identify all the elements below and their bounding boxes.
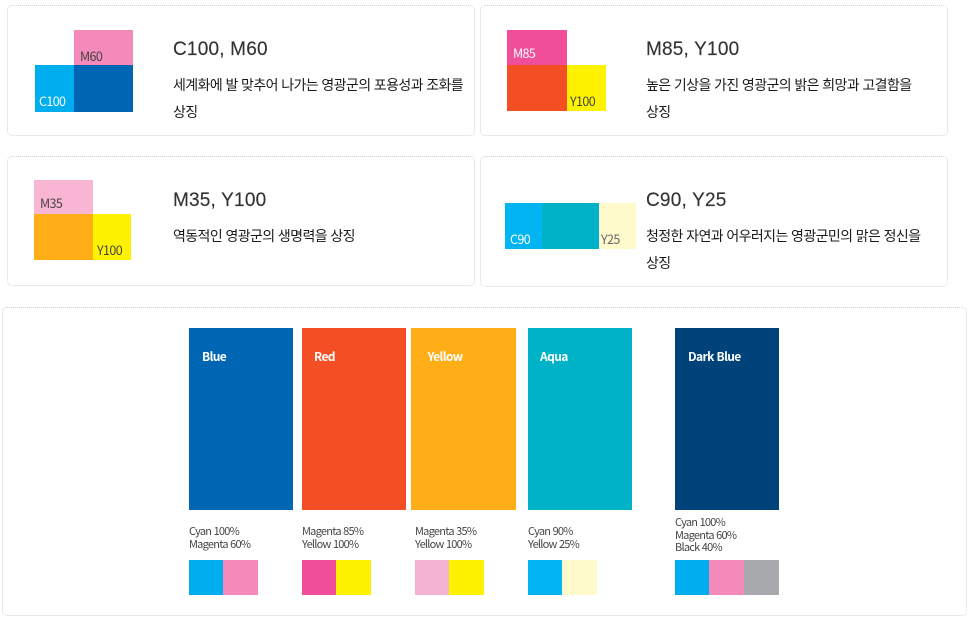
composition text: Magenta 60%: [675, 526, 736, 542]
color bar: Yellow: [411, 328, 516, 510]
composition text: [415, 523, 477, 552]
swatch: cyan: [528, 560, 562, 595]
heading: M35, Y100: M35, Y100: [173, 190, 266, 211]
heading: C90, Y25: C90, Y25: [646, 190, 726, 211]
swatch: cyan: [189, 560, 223, 595]
composition text: Yellow 100%: [302, 536, 358, 552]
palette column: Blue: [189, 328, 293, 595]
palette column: Dark Blue: [675, 328, 779, 595]
panel: color palette: [2, 307, 967, 616]
swatch: magenta: [302, 560, 336, 595]
color bar: Dark Blue: [675, 328, 779, 510]
swatch: magenta: [415, 560, 449, 595]
text: C90 Y25 description: 청정한 자연과 어우러지는 영광군민의 맑은 정신을: [646, 226, 920, 246]
bar label: Dark Blue: Dark Blue: [688, 348, 741, 365]
bar label: Aqua: Aqua: [540, 348, 568, 365]
swatch: M35: [34, 180, 93, 214]
composition text: Yellow 100%: [415, 536, 471, 552]
label: Y100: Y100: [570, 91, 595, 110]
swatch: yellow: [336, 560, 371, 595]
heading: M85, Y100: M85, Y100: [646, 39, 739, 60]
icon: M35 Y100 color mix: [34, 180, 131, 260]
text: C90 Y25 description: [646, 226, 920, 273]
composition text: Magenta 60%: [189, 536, 250, 552]
text: M85 Y100 description: 상징: [646, 102, 671, 122]
color bar: Red: [302, 328, 406, 510]
label: Y100: Y100: [97, 240, 122, 259]
swatch: red mix: [507, 65, 567, 111]
panel: M85 Y100 card: [480, 5, 948, 136]
color bar: Aqua: [528, 328, 632, 510]
bar label: Red: Red: [314, 348, 335, 365]
swatch: orange mix: [34, 214, 93, 260]
label: M35: M35: [40, 193, 62, 212]
composition text: Yellow 25%: [528, 536, 579, 552]
palette column: Red: [302, 328, 406, 595]
text: M35 Y100 description: 역동적인 영광군의 생명력을 상징: [173, 226, 355, 246]
composition text: Black 40%: [675, 539, 722, 555]
composition text: Magenta 85%: [302, 523, 363, 539]
composition text: [675, 514, 737, 555]
swatch: M85: [507, 30, 567, 65]
composition text: [189, 523, 251, 552]
label: M60: M60: [80, 46, 102, 65]
label: M85: M85: [513, 43, 535, 62]
text: C90 Y25 description: 상징: [646, 253, 671, 273]
swatch: C100: [35, 65, 74, 112]
swatch: C90: [505, 203, 542, 249]
composition text: [302, 523, 364, 552]
composition text: Cyan 100%: [675, 514, 725, 530]
composition text: Cyan 90%: [528, 523, 573, 539]
bar label: Blue: Blue: [202, 348, 226, 365]
composition text: [528, 523, 580, 552]
text: C100 M60 description: 상징: [173, 102, 198, 122]
palette column: Aqua: [528, 328, 632, 595]
palette column: Yellow: [411, 328, 516, 595]
swatch: yellow: [449, 560, 484, 595]
icon: C100 M60 color mix: [35, 30, 133, 112]
icon: M85 Y100 color mix: [507, 30, 606, 111]
composition text: Cyan 100%: [189, 523, 239, 539]
panel: M35 Y100 card: [7, 156, 475, 286]
swatch: M60: [74, 30, 133, 65]
swatch: blue mix: [74, 65, 133, 112]
icon: C90 Y25 color mix: [505, 203, 636, 249]
swatch: Y100: [567, 65, 606, 111]
swatch: cyan: [675, 560, 709, 595]
swatch: Y25: [599, 203, 636, 249]
bar label: Yellow: Yellow: [428, 348, 462, 365]
text: M85 Y100 description: [646, 75, 912, 122]
composition text: Magenta 35%: [415, 523, 476, 539]
swatch: magenta: [709, 560, 744, 595]
swatch: Y100: [93, 214, 131, 260]
text: C100 M60 description: [173, 75, 463, 122]
panel: C90 Y25 card: [480, 156, 948, 287]
swatch: magenta: [223, 560, 258, 595]
swatch: teal mix: [542, 203, 599, 249]
label: C90: C90: [510, 229, 530, 248]
heading: C100, M60: C100, M60: [173, 39, 268, 60]
label: C100: C100: [39, 91, 65, 110]
swatch: yellow: [562, 560, 597, 595]
swatch: black: [744, 560, 779, 595]
color bar: Blue: [189, 328, 293, 510]
label: Y25: Y25: [601, 229, 620, 248]
panel: C100 M60 card: [7, 5, 475, 136]
text: C100 M60 description: 세계화에 발 맞추어 나가는 영광군의 포용성과 조화를: [173, 75, 463, 95]
text: M85 Y100 description: 높은 기상을 가진 영광군의 밝은 희망과 고결함을: [646, 75, 912, 95]
